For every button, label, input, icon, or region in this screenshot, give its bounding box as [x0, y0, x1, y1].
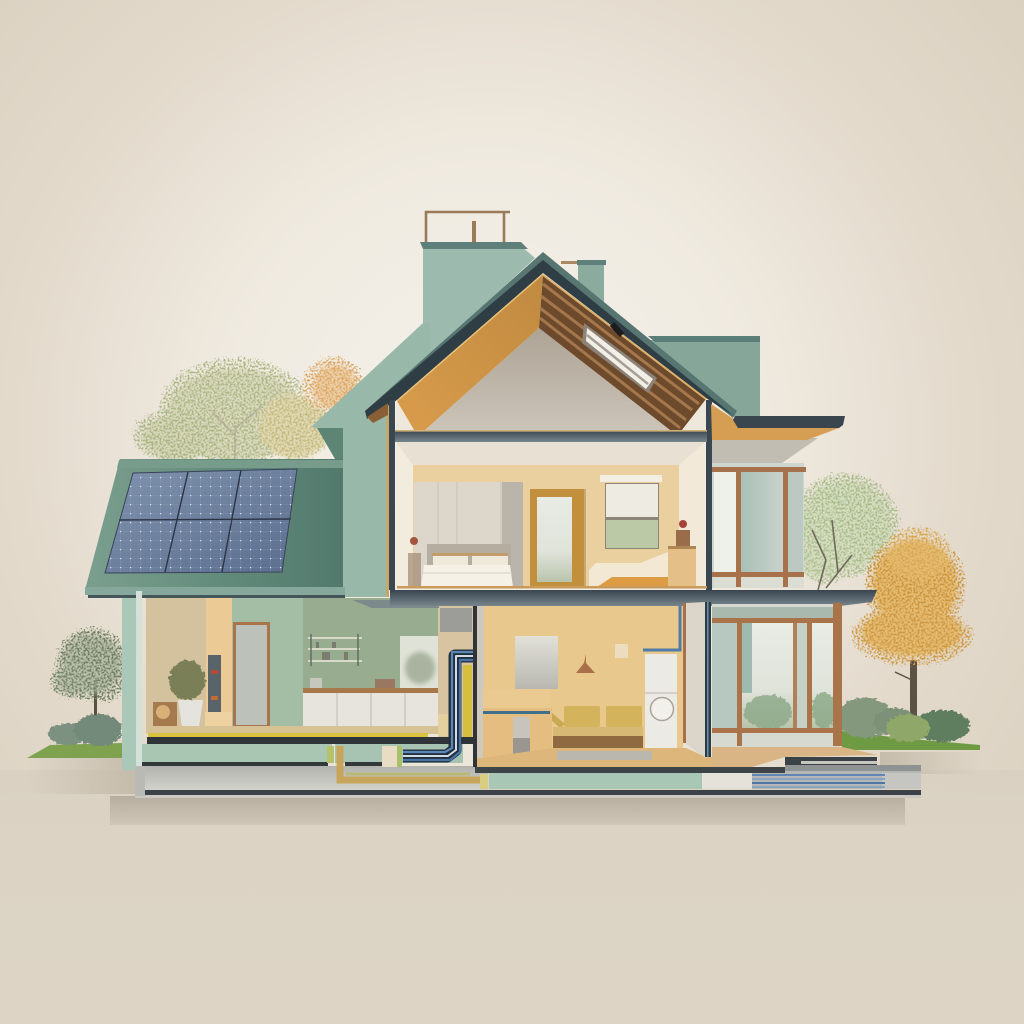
bedroom: wardrobe — [414, 482, 523, 588]
sunroom lower: frame — [712, 603, 842, 746]
room: kitchen wall — [303, 598, 440, 726]
partition wall lower — [683, 602, 711, 758]
bedroom — [396, 442, 707, 588]
counter and cabinets — [303, 678, 440, 726]
living: blue pipe — [643, 604, 680, 650]
living: back wall — [477, 603, 683, 753]
niche — [205, 655, 232, 730]
sunroom upper — [711, 404, 845, 588]
attic floor beam — [395, 430, 707, 442]
sunroom lower — [712, 603, 878, 767]
attic: skylight — [582, 323, 657, 393]
bedroom: back wall — [413, 465, 679, 588]
sunroom lower: left glass — [712, 623, 737, 728]
sunroom upper: eave — [733, 416, 845, 428]
living room — [473, 602, 752, 767]
foundation — [135, 762, 921, 798]
plant and pot — [153, 660, 205, 732]
ground floor left room — [122, 591, 473, 770]
kitchen window — [400, 636, 438, 688]
sunroom upper: soffit — [711, 404, 839, 463]
living: floor — [477, 748, 752, 767]
room: tan wall — [146, 598, 206, 733]
living: rug — [557, 751, 652, 760]
downpipe — [136, 591, 142, 767]
attic: right timber — [539, 275, 706, 430]
side gable wall — [311, 323, 430, 597]
tree and lawn: left — [27, 628, 128, 758]
attic back wall — [425, 328, 670, 430]
floor — [147, 726, 443, 734]
bedroom: door — [530, 489, 586, 588]
room: column — [206, 598, 232, 728]
living: outer edge — [473, 602, 477, 767]
bedroom: daybed and cabinet — [589, 520, 696, 587]
chimney frame: wooden — [426, 212, 510, 242]
chimney: large — [420, 242, 535, 360]
pipes: blue bundle — [403, 652, 473, 760]
living: pendant lamp — [576, 654, 595, 673]
left wing roof — [85, 459, 345, 598]
sunroom upper: frame — [712, 467, 806, 587]
living: side return — [477, 603, 484, 758]
living: sofa — [551, 706, 643, 748]
mid slab — [355, 590, 877, 608]
tree: yellow autumn — [852, 527, 972, 716]
foundation: grey slab — [135, 766, 488, 790]
service riser — [438, 605, 473, 737]
room: green partition — [232, 598, 303, 728]
sunroom lower: right glass — [797, 623, 807, 728]
ground shadow — [28, 752, 980, 825]
main roof — [365, 252, 737, 423]
attic: side walls — [396, 400, 706, 430]
back block: right — [648, 336, 760, 417]
living: wall plate — [615, 644, 628, 658]
bedroom: bed — [408, 537, 513, 587]
tree: pale green behind sunroom — [791, 473, 899, 590]
living: washer — [645, 654, 677, 748]
sunroom lower: interior — [712, 604, 842, 748]
foundation: green section — [489, 773, 702, 789]
living: picture — [515, 636, 558, 689]
shelves — [308, 634, 362, 666]
sunroom lower: shrubs in glass — [744, 692, 836, 729]
wall strip below — [142, 744, 332, 763]
bedroom: left wall — [396, 442, 413, 588]
sunroom lower: centre glass — [742, 623, 793, 728]
bedroom: ceiling — [396, 442, 705, 465]
door — [233, 622, 270, 728]
bedroom: floor line — [397, 586, 707, 588]
bedroom: right wall — [679, 442, 705, 588]
yellow screed — [148, 733, 428, 737]
attic: left soffit — [397, 274, 543, 430]
corner pillar — [122, 598, 136, 770]
pipes: warm loop — [327, 746, 488, 789]
foundation: white section — [702, 773, 752, 789]
tree: large behind left wing — [133, 357, 363, 462]
bedroom: window — [600, 475, 662, 549]
sunroom upper: glazing — [712, 463, 804, 588]
foundation: insulation stripes — [752, 775, 885, 787]
foundation: dark base — [145, 790, 921, 796]
foundation: grey end — [752, 771, 921, 789]
upper floor: structural walls — [389, 400, 712, 590]
chimney: small — [561, 260, 606, 305]
shrubs and lawn: right — [837, 698, 980, 750]
dark slab — [147, 737, 473, 744]
solar panels — [105, 469, 297, 573]
living: vanity — [483, 689, 552, 758]
sunroom lower: deck — [712, 747, 878, 767]
downstand — [352, 600, 438, 608]
